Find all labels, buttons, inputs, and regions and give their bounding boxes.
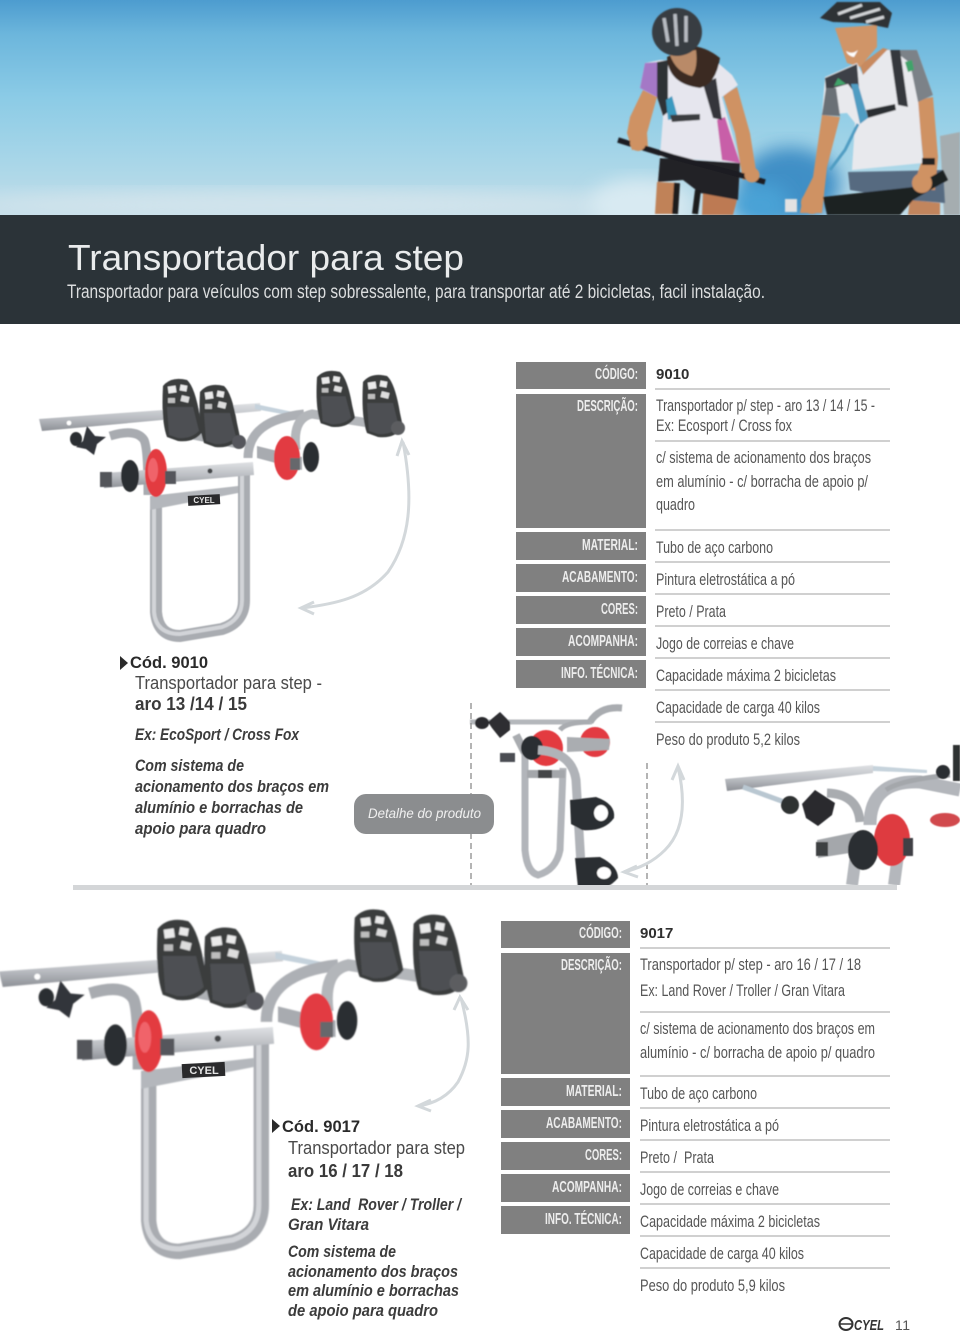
table 9017: label column: CÓDIGO: [579,924,622,942]
table 9010: values: Peso do produto 5,2 kilos [656,731,800,749]
table 9017: label column: ACOMPANHA: [552,1179,622,1196]
table 9010: values [655,366,890,749]
text block: product 9017: de apoio para quadro [288,1301,438,1320]
table 9010: label column: MATERIAL: [582,537,638,554]
plate: CYEL logo on rack 9010: CYEL [193,496,215,505]
header band [0,215,960,324]
table 9010: values: Capacidade de carga 40 kilos [656,699,820,717]
text block: product 9017: Cód. 9017 [282,1117,360,1136]
table 9010: values: 9010 [656,366,689,383]
arrow: rotation of rack 9010 [301,441,409,614]
subtitle: Transportador para veículos com step sobressalente, para transportar até 2 bicicletas, facil instalação. [67,282,765,303]
table 9010: label column: DESCRIÇÃO: [577,397,638,415]
table 9017: values: 9017 [640,925,673,942]
table 9017: values: Transportador p/ step - aro 16 / 17 / 18 [640,956,861,974]
arrow: rotation of rack 9017 [418,997,468,1111]
table 9017: label column: MATERIAL: [566,1083,622,1100]
text block: product 9017 [272,1117,465,1320]
text block: product 9017: Gran Vitara [288,1215,369,1234]
table 9017: values: Capacidade de carga 40 kilos [640,1245,804,1263]
table 9010: values: Tubo de aço carbono [656,539,773,557]
table 9010: values: Ex: Ecosport / Cross fox [656,417,793,435]
product photo: rack 9010 [39,371,405,636]
cyclist: man [785,2,948,215]
product photo: rack 9017 [0,909,467,1251]
text block: product 9010: alumínio e borrachas de [135,798,303,817]
table 9010: label column: CÓDIGO: [595,365,638,383]
hero photo: cyclists against the sky [0,0,960,231]
text block: product 9010: Transportador para step - [135,673,322,693]
table 9017: label column: DESCRIÇÃO: [561,956,622,974]
table 9010: label column: ACABAMENTO: [562,569,638,586]
shelf divider bar [73,885,897,890]
text block: product 9017: acionamento dos braços [288,1262,458,1281]
text block: product 9017: Ex: Land Rover / Troller / [291,1195,463,1214]
table 9017: values: alumínio - c/ borracha de apoio p/ quadro [640,1044,875,1062]
text block: product 9010: aro 13 /14 / 15 [135,694,247,714]
table 9010: values: Jogo de correias e chave [656,635,794,653]
table 9017: values: Peso do produto 5,9 kilos [640,1277,785,1295]
table 9010: label column: INFO. TÉCNICA: [561,665,638,682]
callout: detalhe do produto: Detalhe do produto [368,805,481,821]
plate: CYEL logo on rack 9017: CYEL [189,1065,219,1077]
table 9017: values: Preto / Prata [640,1149,715,1167]
text block: product 9010 [120,653,329,838]
table 9017: values: Capacidade máxima 2 bicicletas [640,1213,820,1231]
title: Transportador para step [68,237,464,278]
table 9017: values [640,925,890,1295]
text block: product 9010: Cód. 9010 [130,653,208,672]
callout: detalhe do produto [354,794,494,834]
mountain: right background [940,132,960,215]
plate: CYEL logo on rack 9017 [182,1062,225,1078]
table 9010: values: quadro [656,496,695,514]
text block: product 9010: Com sistema de [135,756,244,775]
text block: product 9017: Com sistema de [288,1242,396,1261]
text block: product 9010: acionamento dos braços em [135,777,329,796]
table 9017: label column: CORES: [585,1147,622,1164]
table 9010: label column: CORES: [601,601,638,618]
text block: product 9017: Transportador para step [288,1138,465,1158]
text block: product 9010: Ex: EcoSport / Cross Fox [135,725,300,744]
table 9010: values: em alumínio - c/ borracha de apoio p/ [656,473,868,491]
text block: product 9017: aro 16 / 17 / 18 [288,1161,403,1181]
table 9017: values: Pintura eletrostática a pó [640,1117,779,1135]
dashed guide lines [471,703,647,890]
plate: CYEL logo on rack 9010 [188,494,220,506]
table 9010: label column [516,362,646,688]
table 9017: label column: ACABAMENTO: [546,1115,622,1132]
footer: CYEL logo and page number [840,1317,910,1332]
table 9010: values: Capacidade máxima 2 bicicletas [656,667,836,685]
text block: product 9017: em alumínio e borrachas [288,1281,459,1300]
table 9017: values: Ex: Land Rover / Troller / Gran Vitara [640,982,846,1000]
table 9010: values: Transportador p/ step - aro 13 / 14 / 15 - [656,397,875,415]
table 9017: values: c/ sistema de acionamento dos braços em [640,1020,875,1038]
detail photo: side view of rack [470,708,622,889]
arrow: detail rotation [624,766,684,877]
text block: product 9010: apoio para quadro [135,819,266,838]
table 9017: label column: INFO. TÉCNICA: [545,1211,622,1228]
table 9010: values: c/ sistema de acionamento dos braços [656,449,871,467]
table 9017: values: Tubo de aço carbono [640,1085,757,1103]
detail photo: close-up of rack arm and knobs [725,745,960,885]
table 9010: values: Preto / Prata [656,603,727,621]
table 9017: label column [501,921,630,1234]
table 9010: label column: ACOMPANHA: [568,633,638,650]
table 9017: values: Jogo de correias e chave [640,1181,779,1199]
table 9010: values: Pintura eletrostática a pó [656,571,795,589]
cyclist: woman [618,8,765,215]
